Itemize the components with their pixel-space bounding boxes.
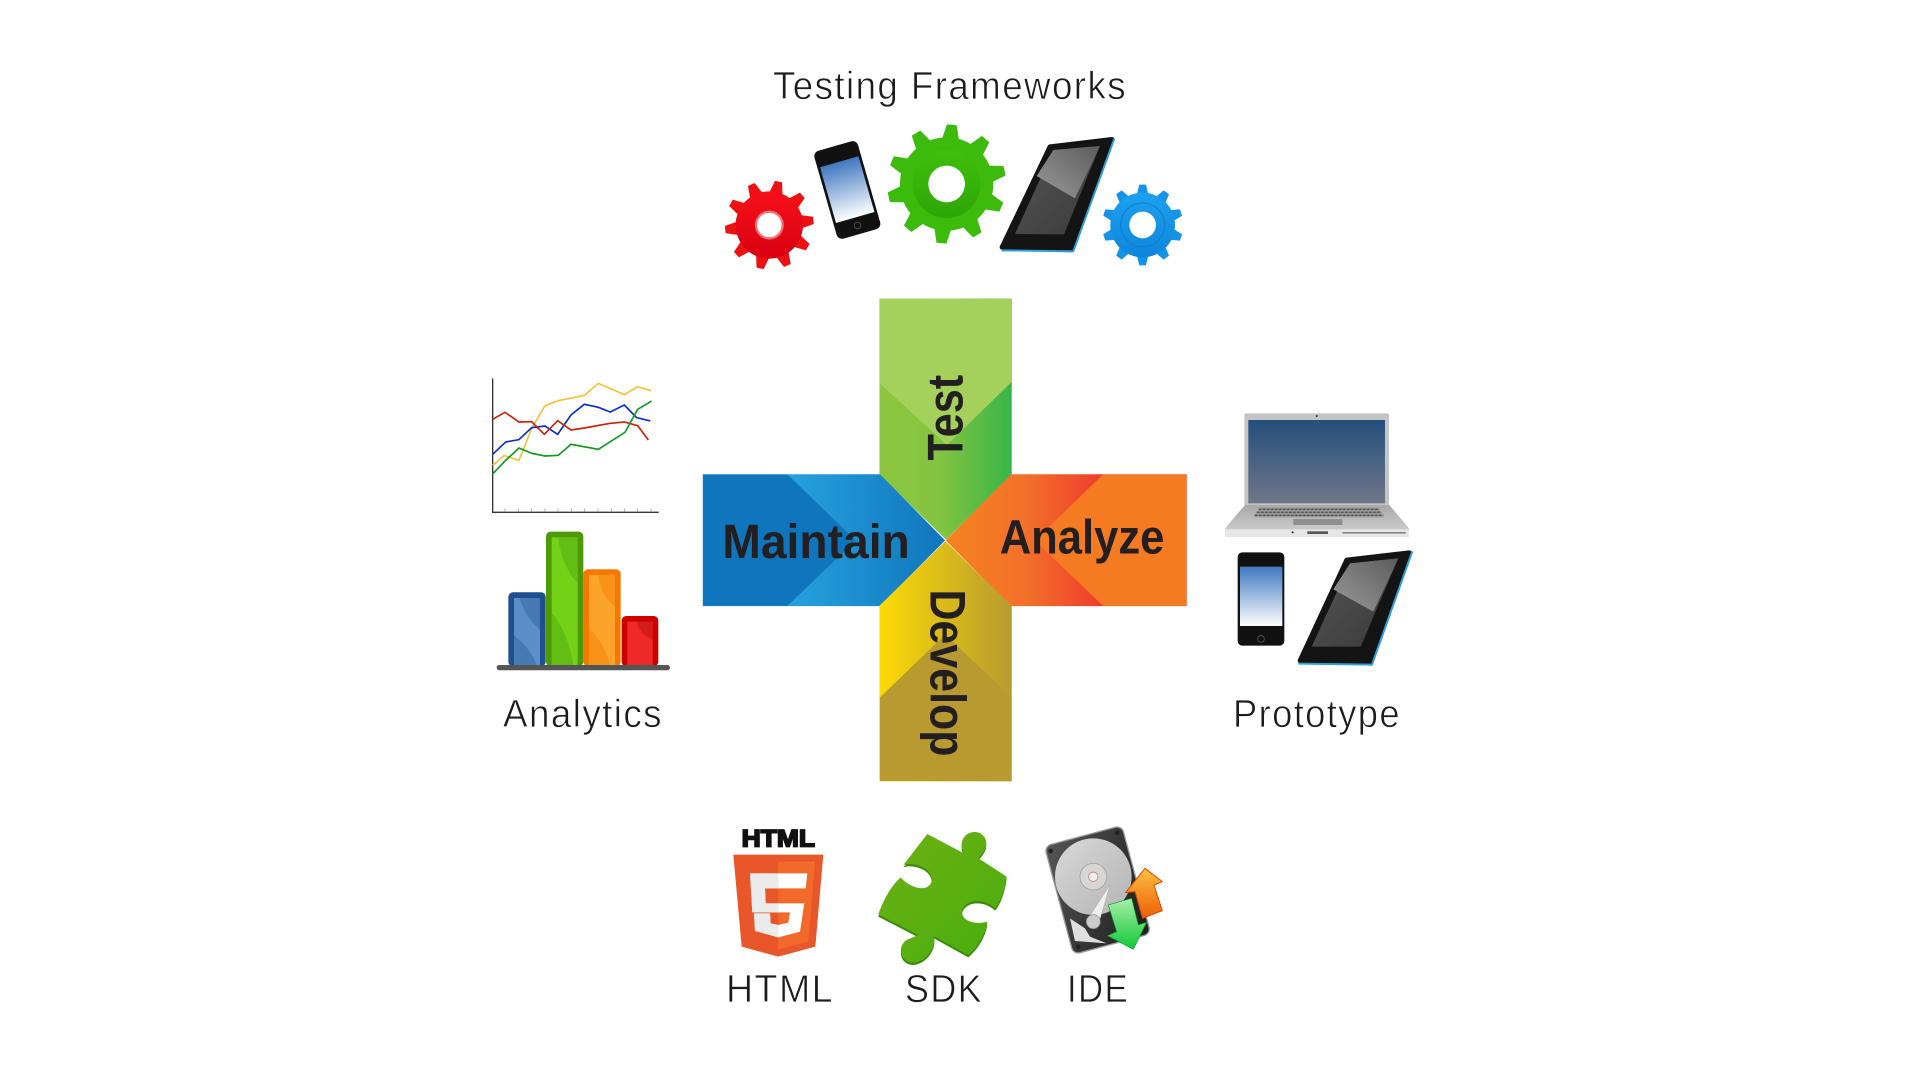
chart: bar chart xyxy=(497,532,670,670)
arm: Test xyxy=(880,299,1011,539)
icon: tablet xyxy=(1298,551,1412,665)
label: HTML: HTML xyxy=(726,968,834,1011)
icon: hard drive with arrows xyxy=(1045,826,1162,954)
center cross diagram xyxy=(703,299,1186,781)
arm: Analyze: Analyze xyxy=(1000,510,1164,564)
arm: Analyze xyxy=(946,475,1186,606)
develop tool icons xyxy=(733,826,1162,965)
icon: puzzle piece xyxy=(878,832,1007,965)
icon: HTML5 shield xyxy=(733,826,823,957)
icon: blue gear xyxy=(1102,185,1183,265)
arm: Develop xyxy=(880,542,1011,781)
arm: Maintain xyxy=(703,475,945,606)
label: Prototype: Prototype xyxy=(1233,693,1401,736)
icon: tablet xyxy=(1002,139,1114,251)
heading: Testing Frameworks: Testing Frameworks xyxy=(773,65,1127,108)
icon: large green gear xyxy=(882,120,1011,248)
label: SDK: SDK xyxy=(905,968,983,1011)
infographic canvas xyxy=(492,70,1414,1002)
icon: HTML5 shield: HTML xyxy=(742,826,815,853)
icon: phone xyxy=(1238,552,1284,646)
icon group: gears and devices xyxy=(717,120,1183,278)
arm: Test: Test xyxy=(918,375,974,461)
analytics icons xyxy=(493,378,670,670)
label: IDE: IDE xyxy=(1067,968,1129,1011)
chart: line chart xyxy=(493,378,659,512)
arm: Develop: Develop xyxy=(919,590,975,756)
icon: red gear xyxy=(717,172,822,278)
icon: tilted phone xyxy=(813,140,882,240)
prototype devices xyxy=(1225,413,1412,665)
label: Analytics: Analytics xyxy=(503,693,663,736)
icon: laptop xyxy=(1225,413,1409,537)
arm: Maintain: Maintain xyxy=(722,515,910,569)
